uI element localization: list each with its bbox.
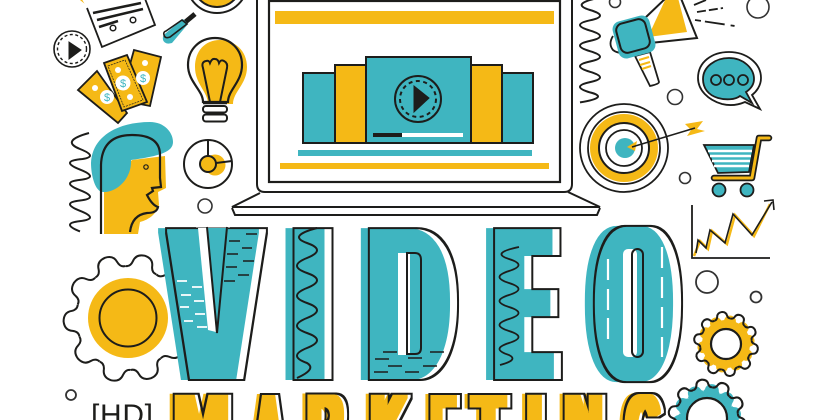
icon: pie gauge (184, 140, 232, 188)
icon: money bills (78, 50, 161, 123)
letter details (177, 228, 662, 378)
screen header bar (275, 11, 554, 24)
icon: money bills: $ (140, 73, 146, 85)
letter D: D (370, 184, 454, 420)
laptop screen (269, 1, 560, 182)
icon: target with arrow (580, 104, 705, 192)
icon: growth line chart (692, 200, 774, 258)
D counter (392, 245, 426, 361)
icon: left squiggle (70, 133, 90, 231)
O counter (612, 240, 650, 365)
icon: magnifier (163, 0, 248, 44)
laptop (232, 0, 600, 215)
word: VIDEO (186, 183, 674, 420)
icon: money bills: $ (104, 92, 110, 104)
icon: light bulb (188, 38, 247, 122)
letter E: E (503, 183, 551, 420)
icon: yellow gear (682, 300, 770, 388)
teal caption bar (298, 150, 532, 156)
icon: document (80, 0, 155, 47)
decorative circles top right (610, 0, 769, 184)
icon: shopping cart (704, 138, 769, 196)
word: MARKETING (175, 375, 662, 420)
icon: megaphone (610, 0, 735, 86)
laptop base (232, 192, 600, 215)
icon: play button small (54, 31, 90, 67)
icon: speech bubble (698, 52, 761, 109)
icon: money bills: $ (120, 78, 126, 90)
laptop body (257, 0, 572, 192)
letter O: O (602, 184, 674, 420)
letter counters (196, 222, 650, 365)
icon: right squiggle (580, 0, 600, 102)
video carousel (303, 57, 533, 143)
letter I: I (279, 183, 347, 420)
icon: teal gear (654, 365, 760, 420)
icon: large gear (47, 239, 209, 397)
icon: head profile (91, 122, 173, 234)
V notch (196, 222, 230, 333)
letter V: V (186, 184, 247, 420)
decorative circles lower right (66, 271, 762, 400)
decorative circle marker (198, 199, 212, 213)
yellow caption bar (280, 163, 549, 169)
